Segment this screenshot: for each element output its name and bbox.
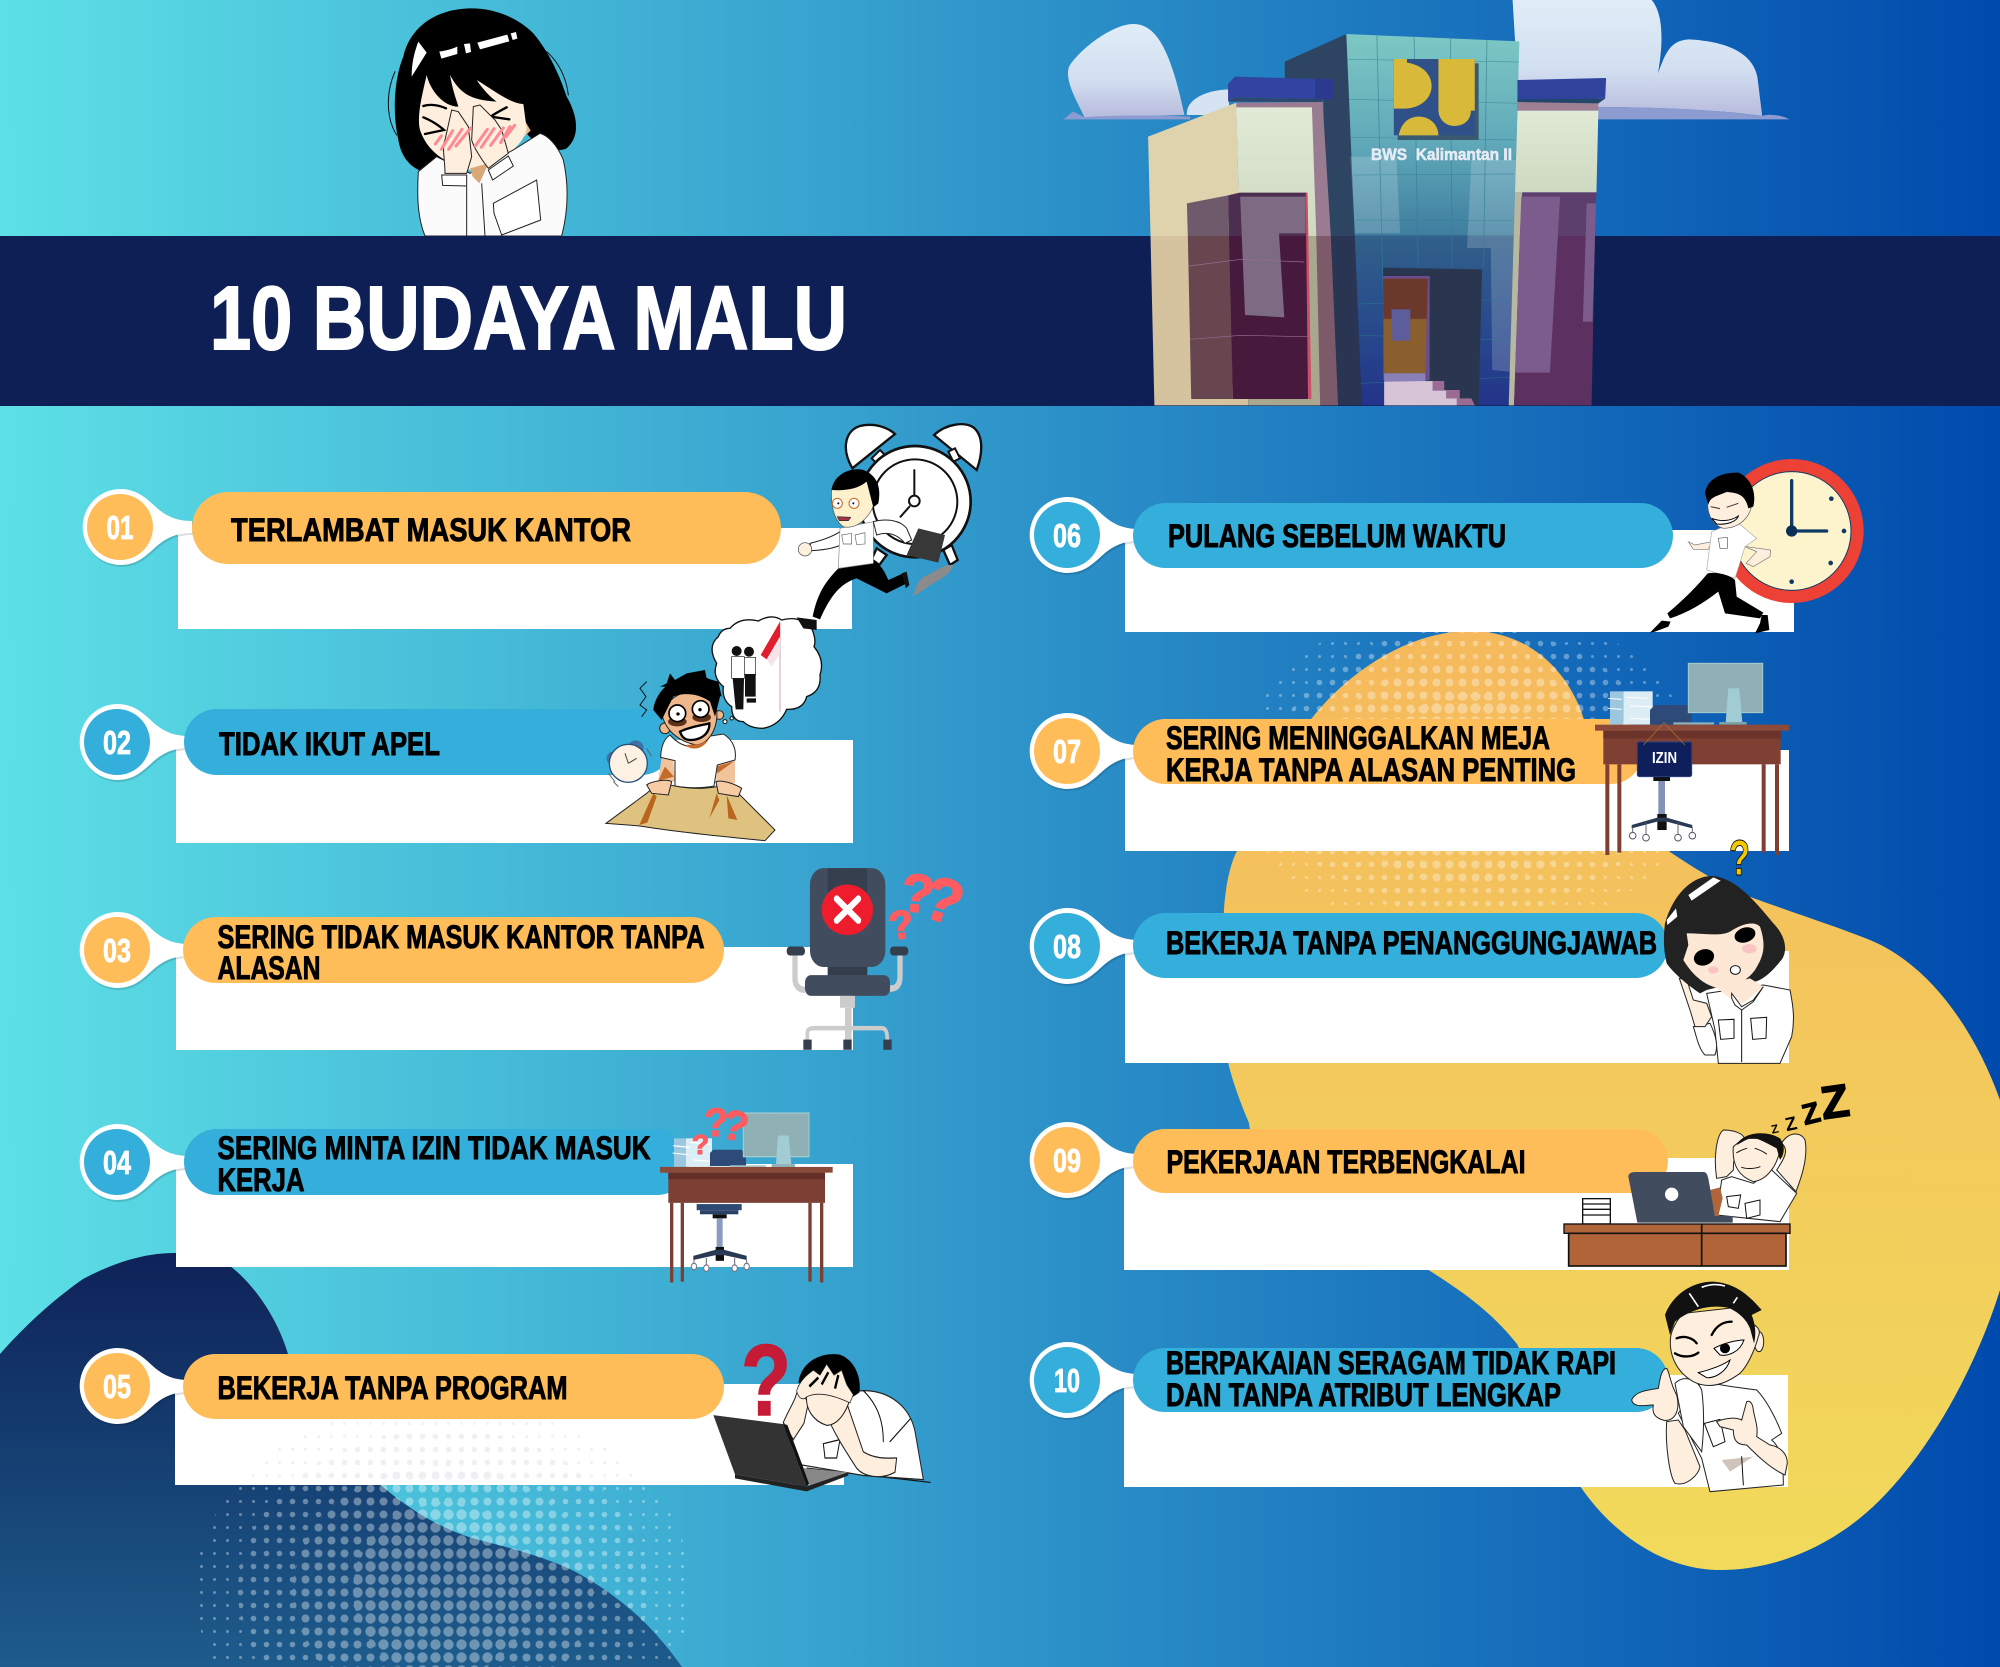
badge 03 bbox=[80, 912, 190, 990]
row 02 bbox=[80, 704, 853, 843]
badge 06: 06 bbox=[1053, 517, 1081, 554]
question marks: ? bbox=[704, 1101, 728, 1145]
row 06 bbox=[1030, 497, 1794, 632]
pill 05 bbox=[183, 1354, 724, 1419]
snore letters bbox=[1770, 1074, 1852, 1137]
question marks: ? bbox=[915, 862, 972, 940]
question marks: ? bbox=[692, 1129, 709, 1160]
row 09 bbox=[1030, 1122, 1789, 1270]
sign text: IZIN bbox=[1652, 750, 1677, 767]
badge 10 bbox=[1030, 1342, 1140, 1420]
text 05: BEKERJA TANPA PROGRAM bbox=[218, 1370, 568, 1406]
badge 03: 03 bbox=[103, 932, 131, 969]
pill 08 bbox=[1133, 913, 1668, 978]
row 10 bbox=[1030, 1342, 1788, 1487]
row 05 bbox=[80, 1348, 844, 1485]
yellow question mark: ? bbox=[1729, 830, 1750, 886]
illustration: clouds behind building bbox=[1063, 0, 1789, 119]
illustration: empty office chair with X bbox=[787, 862, 972, 1050]
illustration: running man with alarm clock bbox=[797, 424, 981, 630]
badge 08 bbox=[1030, 908, 1140, 986]
pill 09 bbox=[1133, 1129, 1668, 1193]
text 04: SERING MINTA IZIN TIDAK MASUK bbox=[218, 1130, 651, 1166]
badge 09 bbox=[1030, 1122, 1140, 1200]
pill 01 bbox=[192, 492, 781, 564]
question marks: ? bbox=[717, 1100, 754, 1151]
ringing clock bbox=[607, 740, 652, 787]
clock bbox=[1720, 459, 1864, 603]
header band bbox=[0, 236, 2000, 406]
question marks: ? bbox=[886, 902, 916, 949]
badge 10: 10 bbox=[1054, 1362, 1080, 1399]
illustration: man leaving beside wall clock bbox=[1650, 459, 1864, 633]
badge 05 bbox=[80, 1348, 190, 1426]
man bbox=[797, 469, 945, 630]
text 10: DAN TANPA ATRIBUT LENGKAP bbox=[1166, 1377, 1561, 1413]
snore letters: Z bbox=[1770, 1121, 1780, 1137]
text 06: PULANG SEBELUM WAKTU bbox=[1168, 518, 1506, 554]
text 04: KERJA bbox=[218, 1162, 304, 1198]
man bbox=[1650, 473, 1771, 633]
question marks bbox=[886, 862, 972, 949]
question marks: ? bbox=[897, 862, 938, 926]
row 04 bbox=[80, 1124, 853, 1267]
badge 01 bbox=[83, 489, 193, 567]
question marks bbox=[692, 1100, 754, 1160]
badge 07: 07 bbox=[1053, 733, 1081, 770]
badge 07 bbox=[1030, 713, 1140, 791]
snore letters: Z bbox=[1817, 1074, 1852, 1129]
illustration: desk with question marks bbox=[660, 1100, 833, 1282]
snore letters: Z bbox=[1783, 1113, 1799, 1136]
badge 04 bbox=[80, 1124, 190, 1202]
badge 02: 02 bbox=[103, 724, 131, 761]
text 03: SERING TIDAK MASUK KANTOR TANPA bbox=[218, 919, 704, 955]
text 07: KERJA TANPA ALASAN PENTING bbox=[1166, 752, 1576, 788]
text 08: BEKERJA TANPA PENANGGUNGJAWAB bbox=[1166, 925, 1657, 961]
snore letters: Z bbox=[1799, 1097, 1824, 1132]
illustration: winking man pointing bbox=[1632, 1282, 1787, 1492]
question mark: ? bbox=[741, 1325, 791, 1437]
halftone dots: centre right bbox=[1266, 632, 1672, 906]
pill 10 bbox=[1133, 1348, 1668, 1412]
text 09: PEKERJAAN TERBENGKALAI bbox=[1166, 1144, 1526, 1180]
badge 09: 09 bbox=[1053, 1142, 1081, 1179]
text 03: ALASAN bbox=[218, 950, 320, 986]
man bbox=[653, 670, 735, 788]
blanket bbox=[606, 780, 775, 841]
pill 06 bbox=[1133, 503, 1673, 568]
badge 05: 05 bbox=[103, 1368, 131, 1405]
badge 01: 01 bbox=[106, 509, 134, 546]
row 03 bbox=[80, 912, 853, 1050]
badge 02 bbox=[80, 704, 190, 782]
thought bubble bbox=[712, 617, 822, 728]
building sign text: BWS Kalimantan II bbox=[1371, 145, 1512, 164]
badge 04: 04 bbox=[103, 1144, 131, 1181]
illustration: girl covering her face bbox=[388, 8, 576, 236]
row 07 bbox=[1030, 713, 1789, 851]
pill 07 bbox=[1133, 719, 1643, 784]
illustration: empty desk with IZIN sign bbox=[1595, 663, 1789, 855]
badge 08: 08 bbox=[1053, 928, 1081, 965]
row 01 bbox=[83, 489, 852, 629]
illustration: sleeping worker at desk bbox=[1564, 1074, 1852, 1266]
text 02: TIDAK IKUT APEL bbox=[219, 726, 440, 762]
yellow blob bbox=[1223, 631, 2000, 1570]
illustration: stressed man at laptop bbox=[713, 1325, 931, 1491]
row 08 bbox=[1030, 908, 1789, 1063]
dust puff bbox=[913, 565, 953, 597]
pill 03 bbox=[183, 917, 724, 983]
navy blob bbox=[0, 1253, 682, 1667]
badge 06 bbox=[1030, 497, 1140, 575]
alarm clock bbox=[846, 424, 981, 565]
halftone dots: bottom left bbox=[200, 1485, 684, 1667]
pill 04 bbox=[184, 1129, 690, 1195]
illustration: BWS office building bbox=[1148, 34, 1606, 405]
text 07: SERING MENINGGALKAN MEJA bbox=[1166, 720, 1550, 756]
pill 02 bbox=[184, 709, 674, 775]
title: 10 BUDAYA MALU bbox=[210, 269, 847, 369]
illustration: man in blanket with thought bubble bbox=[606, 617, 822, 841]
text 01: TERLAMBAT MASUK KANTOR bbox=[231, 512, 631, 548]
illustration: thinking girl with question mark bbox=[1664, 830, 1793, 1063]
text 10: BERPAKAIAN SERAGAM TIDAK RAPI bbox=[1166, 1345, 1616, 1381]
